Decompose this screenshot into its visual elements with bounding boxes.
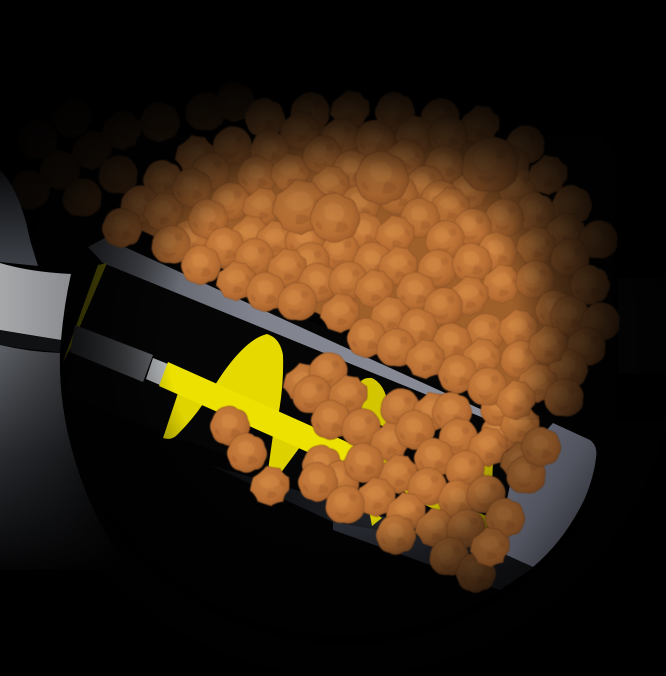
lower kibble pile	[210, 353, 539, 593]
yellow auger	[159, 334, 493, 532]
big kibbles	[355, 137, 518, 204]
feed tube body	[64, 240, 560, 565]
dim kibbles behind window top-left	[10, 82, 255, 216]
blade fragment d	[466, 508, 492, 532]
dark ring	[0, 330, 61, 352]
light band	[0, 263, 71, 340]
auger drive shaft	[70, 325, 168, 385]
top darkening	[0, 0, 666, 240]
lower cylinder side shading	[0, 345, 130, 570]
lower-middle blade	[268, 435, 300, 474]
upper cylinder	[0, 170, 38, 266]
tube lower wall	[210, 465, 530, 568]
front kibbles	[227, 375, 507, 593]
machine cylinder left	[0, 170, 130, 570]
blade fragment a	[373, 455, 392, 480]
kibbles resting on tube end	[470, 427, 561, 567]
blade fragment e	[369, 510, 382, 526]
lower-left blade	[163, 393, 203, 439]
middle rows	[188, 187, 619, 416]
lower cylinder	[0, 345, 130, 570]
big blade	[215, 334, 283, 417]
shaft	[159, 362, 356, 470]
viewing window circle	[62, 79, 628, 645]
front row on shelf	[152, 226, 535, 420]
back kibbles	[210, 353, 539, 498]
upper right blade	[358, 378, 388, 428]
grey rod	[70, 325, 153, 382]
olive strip at tube opening	[63, 263, 107, 362]
blade fragment c	[400, 488, 444, 512]
upper kibble pile	[102, 90, 619, 420]
tube lower wall dark fill	[333, 522, 533, 590]
top rows	[102, 90, 617, 260]
blade fragment b	[479, 460, 493, 486]
tube rounded end	[500, 423, 596, 567]
big central kibbles	[272, 179, 360, 242]
storage shelf	[88, 238, 500, 423]
silver collar	[146, 358, 168, 385]
right housing edge	[618, 278, 666, 373]
pile base shading	[130, 125, 590, 400]
right darkening	[510, 70, 666, 420]
